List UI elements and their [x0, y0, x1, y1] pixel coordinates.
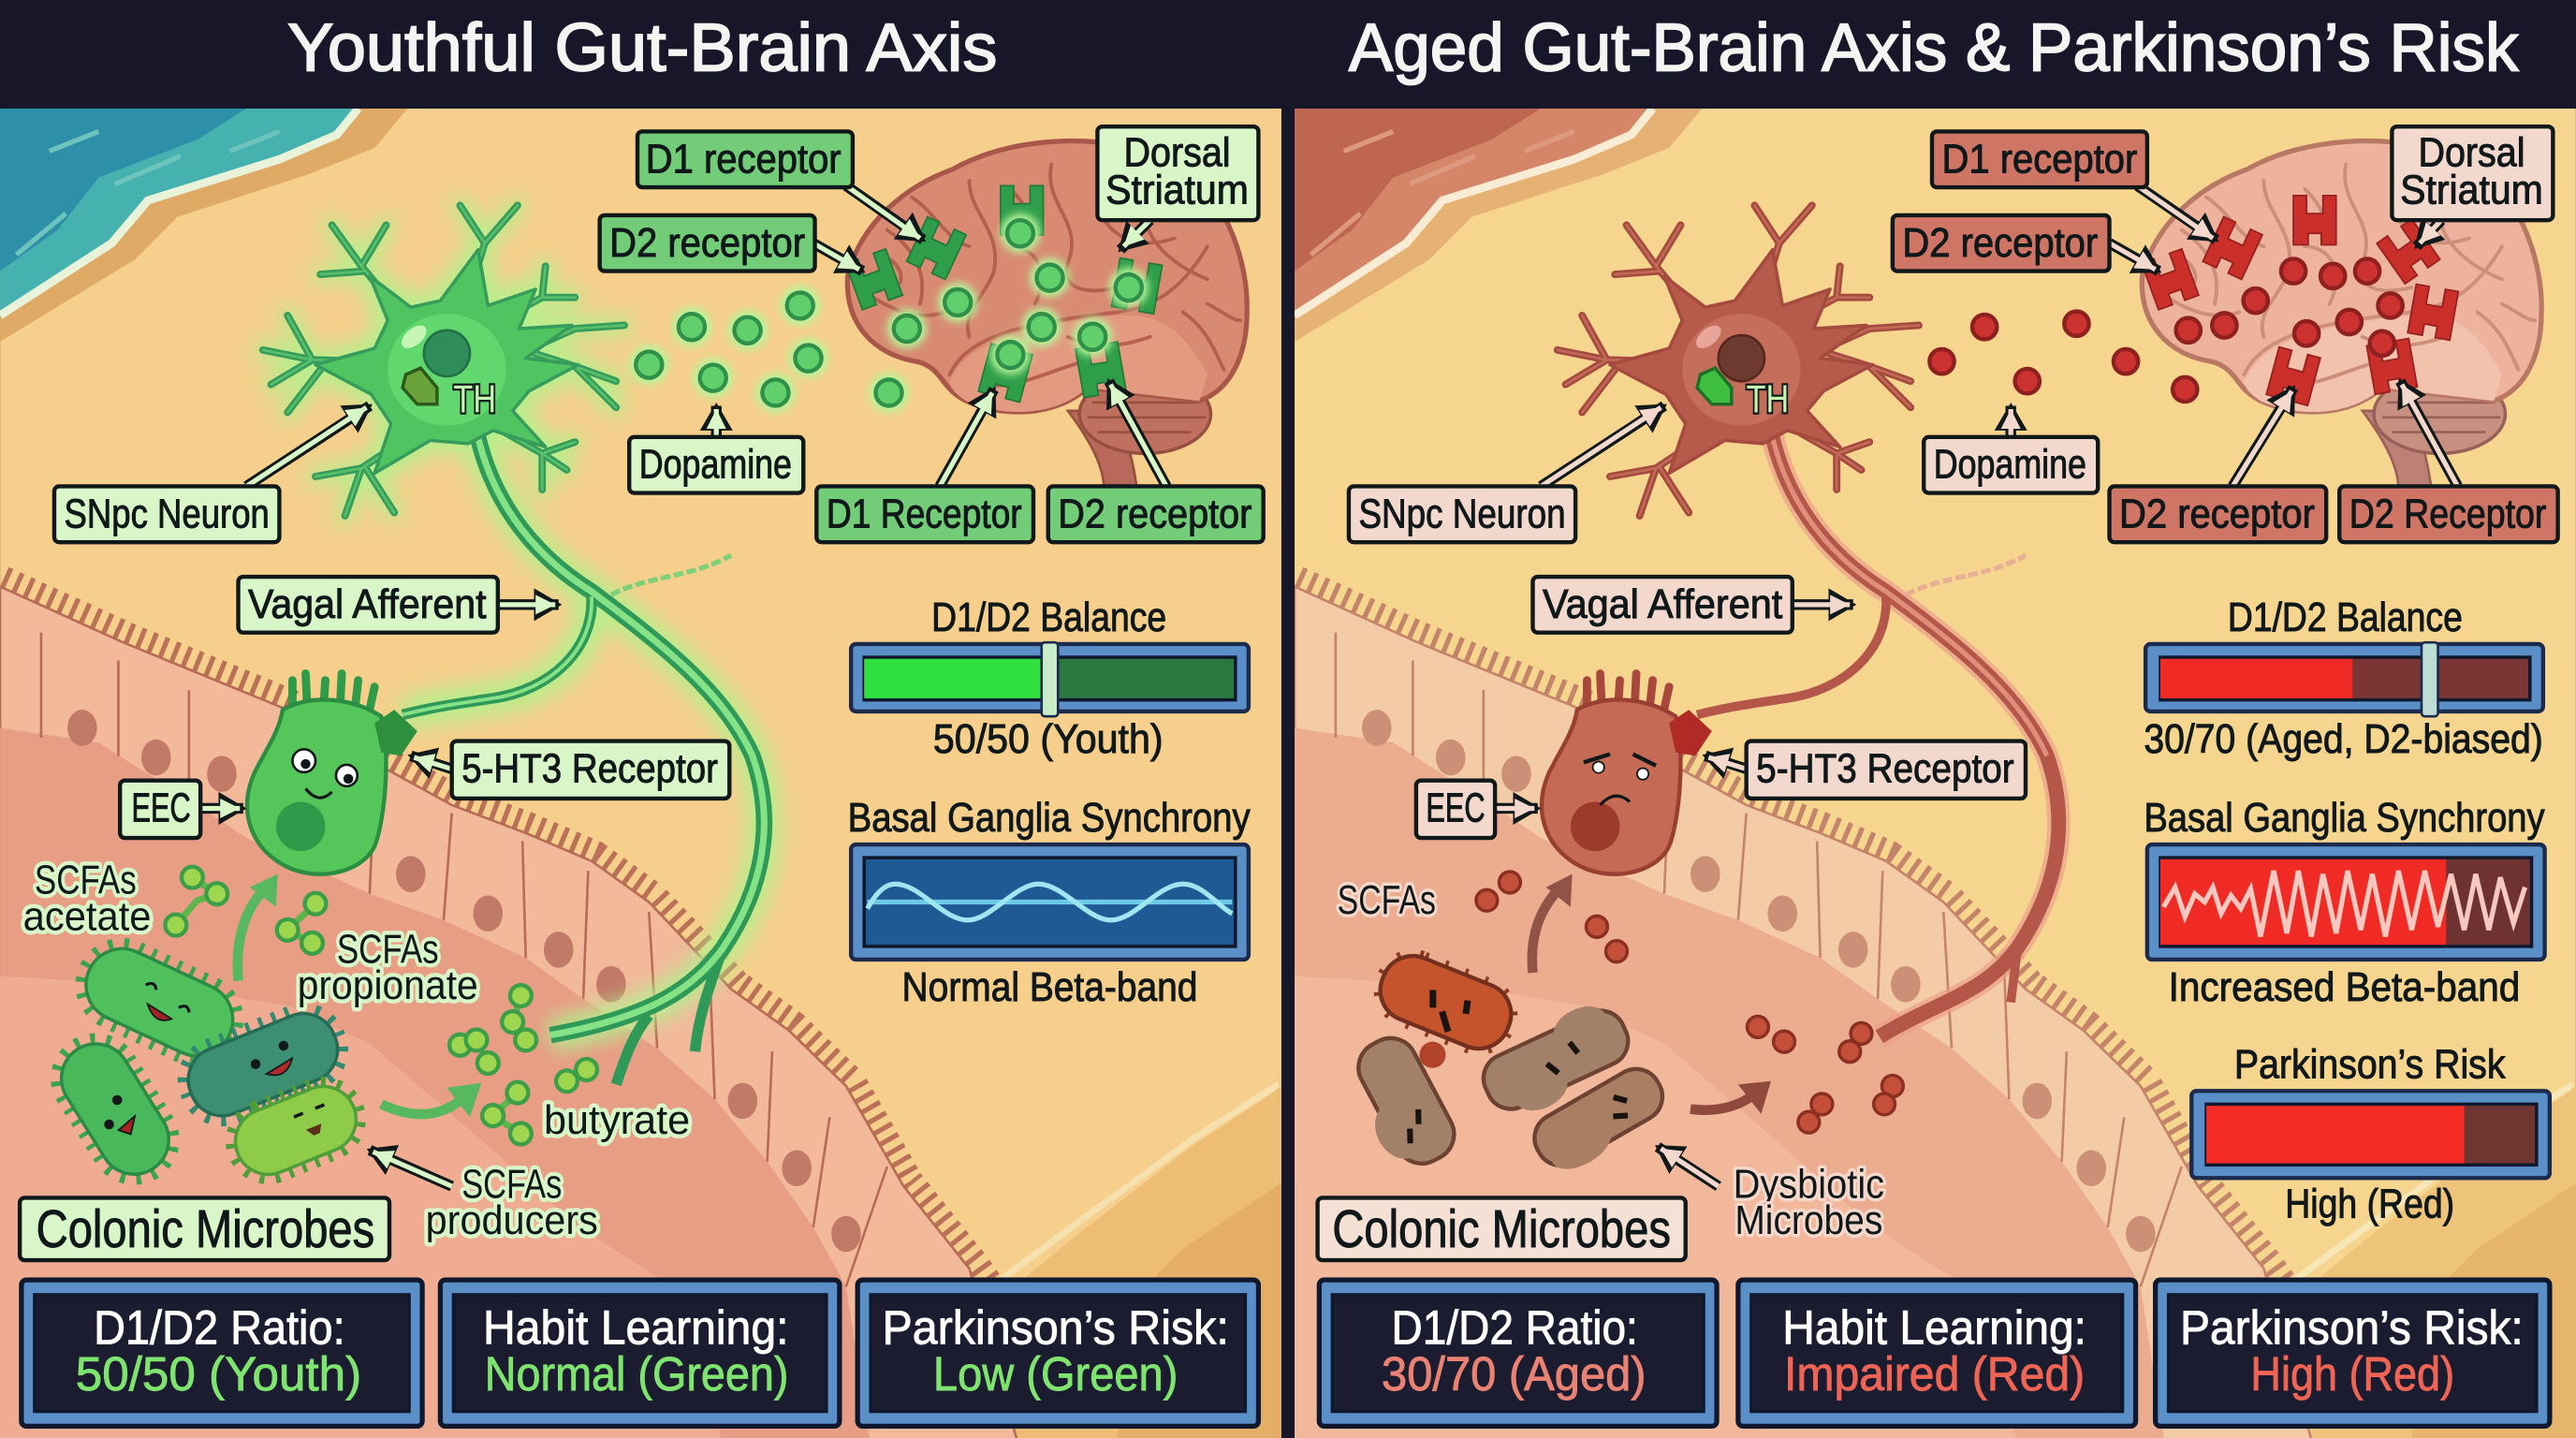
- basal ganglia synchrony chart: Increased Beta-band: [2169, 964, 2520, 1010]
- text: SCFAs propionate: propionate: [298, 962, 478, 1008]
- label: EEC: [1416, 781, 1495, 838]
- D1/D2 balance gauge: [2144, 594, 2543, 762]
- nucleus: [424, 330, 470, 376]
- sand background: [0, 109, 1281, 1277]
- basal ganglia synchrony chart: [848, 795, 1251, 1010]
- label: SNpc Neuron: SNpc Neuron: [65, 491, 270, 536]
- stat: D1/D2 ratio: D1/D2 Ratio:: [1392, 1301, 1638, 1355]
- callout arrows: [1495, 185, 2458, 1186]
- basal ganglia synchrony chart: Basal Ganglia Synchrony: [848, 795, 1251, 841]
- TH enzyme: [402, 368, 437, 404]
- label: D2 receptor lower left: D2 receptor: [2119, 491, 2315, 536]
- SCFA molecules: [165, 867, 597, 1144]
- stat: habit learning: Habit Learning:: [483, 1301, 788, 1355]
- stat: Parkinson's risk: High (Red): [2250, 1347, 2454, 1401]
- label: D1 receptor: D1 receptor: [1942, 136, 2137, 182]
- stat: Parkinson's risk: Parkinson’s Risk:: [883, 1301, 1229, 1355]
- stat: Parkinson's risk: [2156, 1280, 2550, 1426]
- label: EEC: EEC: [131, 785, 191, 831]
- label: Dopamine: [629, 437, 803, 493]
- dysbiotic microbes: [1338, 946, 1676, 1181]
- SNpc neuron with axon: [1558, 205, 2058, 1036]
- panel: aged gut-brain axis: [1295, 109, 2576, 1438]
- water: [0, 109, 359, 315]
- Parkinson's risk gauge: [2191, 1041, 2550, 1226]
- label: Dopamine: Dopamine: [639, 442, 792, 488]
- SNpc neuron with axon: [263, 205, 764, 1084]
- panel: youthful gut-brain axis: [0, 109, 1281, 1438]
- text: SCFAs acetate: SCFAs: [35, 858, 137, 903]
- label: Dorsal Striatum: Striatum: [2400, 168, 2543, 213]
- label: Dorsal Striatum: Striatum: [1105, 168, 1249, 213]
- label: Colonic Microbes: Colonic Microbes: [37, 1199, 374, 1258]
- polluted water: [1295, 109, 1653, 315]
- dopamine vesicles and receptors: [629, 185, 1163, 413]
- arrow: microbes to EEC: [238, 874, 278, 981]
- stat: habit learning: Impaired (Red): [1784, 1347, 2085, 1401]
- label: SNpc Neuron: SNpc Neuron: [1358, 491, 1566, 536]
- stat: D1/D2 ratio: D1/D2 Ratio:: [94, 1301, 345, 1355]
- Parkinson's risk gauge: Parkinson’s Risk: [2234, 1041, 2506, 1087]
- Parkinson's risk gauge: High (Red): [2285, 1181, 2454, 1226]
- basal ganglia synchrony chart: [2144, 795, 2545, 1010]
- label: D2 Receptor lower right: D2 Receptor: [2349, 491, 2546, 536]
- text: SCFAs producers: [426, 1161, 598, 1243]
- label: 5-HT3 Receptor: 5-HT3 Receptor: [1756, 745, 2014, 791]
- D1/D2 balance gauge: 50/50 (Youth): [933, 716, 1164, 762]
- title: youthful: Youthful Gut-Brain Axis: [287, 10, 997, 85]
- arrow: faded SCFA release: [1690, 1081, 1771, 1114]
- D1/D2 balance gauge: [851, 594, 1249, 762]
- brain: [2142, 141, 2541, 490]
- label: D2 receptor: D2 receptor: [1902, 220, 2098, 266]
- label: D2 receptor: D2 receptor: [609, 220, 805, 266]
- label: EEC: EEC: [1426, 785, 1486, 831]
- text: Dysbiotic Microbes: Dysbiotic: [1734, 1161, 1884, 1207]
- text: Dysbiotic Microbes: Microbes: [1734, 1197, 1882, 1243]
- stat: habit learning: Normal (Green): [485, 1347, 788, 1401]
- nucleus: [1719, 335, 1764, 381]
- text: butyrate: butyrate: [544, 1097, 690, 1143]
- EEC cell: [247, 674, 417, 874]
- label: Colonic Microbes: Colonic Microbes: [1332, 1199, 1671, 1258]
- stat: habit learning: [440, 1280, 840, 1426]
- label: Vagal Afferent: Vagal Afferent: [1543, 581, 1782, 627]
- label: Vagal Afferent: Vagal Afferent: [248, 581, 487, 627]
- arrow: faded SCFA uptake: [1532, 874, 1573, 973]
- label: Dopamine: [1924, 437, 2098, 493]
- label: Dorsal Striatum: [1097, 126, 1258, 220]
- stat: D1/D2 ratio: [1319, 1280, 1717, 1426]
- label: 5-HT3 Receptor: 5-HT3 Receptor: [461, 745, 718, 791]
- arrow: microbes to butyrate: [381, 1083, 481, 1117]
- label: D2 receptor lower: D2 receptor: [1058, 491, 1251, 536]
- label: D1 receptor: D1 receptor: [646, 136, 842, 182]
- colonic microbes: [49, 937, 366, 1187]
- basal ganglia synchrony chart: Normal Beta-band: [902, 964, 1197, 1010]
- text: SCFAs acetate: acetate: [23, 893, 152, 939]
- text: SCFAs propionate: [298, 926, 478, 1008]
- colon epithelium: [0, 587, 1018, 1438]
- D1/D2 balance gauge: D1/D2 Balance: [931, 594, 1166, 640]
- stat: Parkinson's risk: [857, 1280, 1258, 1426]
- callout arrows: [200, 185, 1166, 1186]
- label: EEC: [120, 781, 200, 838]
- stat: habit learning: Habit Learning:: [1782, 1301, 2086, 1355]
- text: Dysbiotic Microbes: [1734, 1161, 1884, 1243]
- text: SCFAs propionate: SCFAs: [337, 926, 439, 972]
- label: Dorsal Striatum: Dorsal: [2418, 129, 2525, 175]
- text: SCFAs: SCFAs: [1338, 877, 1436, 923]
- label: D1 Receptor: D1 Receptor: [827, 491, 1022, 536]
- sand background: [1295, 109, 2576, 1277]
- text: SCFAs acetate: [23, 858, 152, 939]
- EEC cell: [1542, 674, 1712, 874]
- stat: D1/D2 ratio: 30/70 (Aged): [1382, 1347, 1647, 1401]
- text: SCFAs producers: producers: [426, 1197, 598, 1243]
- D1/D2 balance gauge: D1/D2 Balance: [2228, 594, 2463, 640]
- depleted SCFA molecules: [1476, 872, 1903, 1133]
- title: aged: Aged Gut-Brain Axis & Parkinson’s Risk: [1349, 10, 2520, 85]
- stat: D1/D2 ratio: [22, 1280, 422, 1426]
- stat: D1/D2 ratio: 50/50 (Youth): [76, 1347, 361, 1401]
- label: Dopamine: Dopamine: [1934, 442, 2086, 488]
- stat: habit learning: [1738, 1280, 2136, 1426]
- brain: [847, 141, 1247, 490]
- text: SCFAs producers: SCFAs: [461, 1161, 562, 1207]
- stat: Parkinson's risk: Parkinson’s Risk:: [2180, 1301, 2524, 1355]
- label: Dorsal Striatum: [2392, 126, 2553, 220]
- colon epithelium: [1295, 587, 2313, 1438]
- stat: Parkinson's risk: Low (Green): [933, 1347, 1178, 1401]
- TH enzyme: [1697, 368, 1732, 404]
- dopamine vesicles and receptors: [1929, 196, 2458, 405]
- TH label: TH: [1747, 377, 1789, 421]
- TH label: TH: [453, 377, 496, 421]
- label: Dorsal Striatum: Dorsal: [1123, 129, 1231, 175]
